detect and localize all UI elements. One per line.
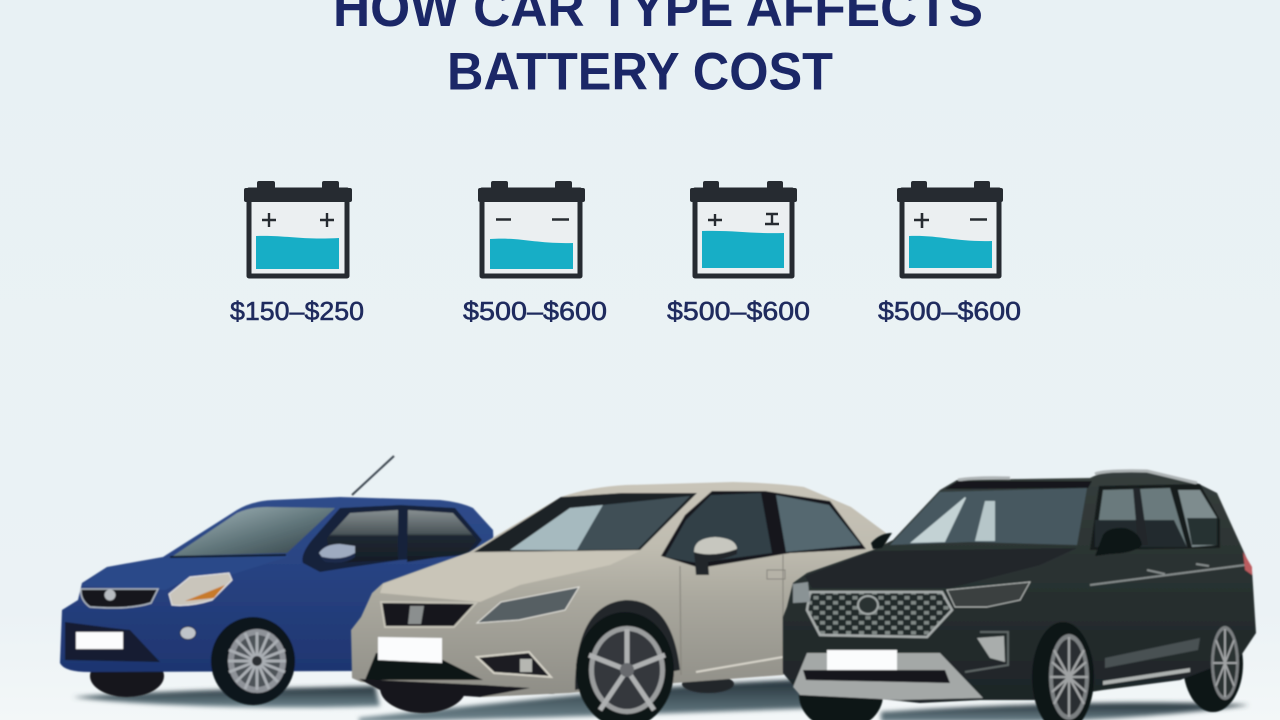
antenna	[352, 456, 394, 495]
wheel arch	[575, 600, 680, 690]
license plate	[827, 650, 897, 670]
small underbody wheel	[526, 676, 570, 694]
mirror	[319, 544, 355, 561]
left corner lamp	[793, 582, 810, 603]
rear tyre	[682, 675, 734, 693]
battery column: $500–$600 first	[463, 181, 607, 326]
body	[783, 472, 1256, 703]
price: $500–$600: $500–$600	[463, 296, 607, 326]
front bumper intake	[65, 622, 160, 662]
windshield	[474, 493, 697, 552]
side windows	[327, 510, 398, 563]
hood	[805, 548, 1077, 588]
fog lamp	[977, 636, 1005, 662]
car: dark SUV	[783, 471, 1256, 720]
sedan-side mirror	[871, 533, 892, 549]
windshield	[890, 488, 1087, 545]
hood	[82, 556, 290, 590]
black roof	[945, 481, 1092, 489]
front wheel	[576, 612, 674, 720]
license plate	[378, 637, 442, 663]
price: $500–$600: $500–$600	[667, 296, 810, 326]
body	[351, 482, 890, 697]
title	[333, 0, 983, 102]
window frame	[302, 505, 482, 572]
headlight	[169, 573, 232, 605]
grille	[81, 589, 158, 608]
battery column: $500–$600 third	[878, 181, 1021, 326]
car: blue hatchback	[60, 456, 500, 705]
near-side front wheel	[799, 660, 883, 720]
hood	[380, 551, 640, 602]
front side window	[665, 493, 772, 563]
title: BATTERY COST	[447, 42, 833, 102]
rear tyre	[1183, 616, 1243, 712]
mirror	[694, 537, 737, 559]
price: $500–$600: $500–$600	[878, 296, 1021, 326]
license plate	[76, 632, 123, 649]
headlight	[947, 582, 1030, 607]
battery column: $150–$250	[230, 181, 364, 326]
lower chrome bumper	[793, 653, 983, 700]
roof rails	[958, 471, 1197, 483]
price: $150–$250: $150–$250	[230, 296, 364, 326]
rear wheel	[1211, 626, 1239, 700]
side windows	[1095, 488, 1187, 547]
icon: battery 2	[478, 181, 585, 276]
beltline and handles	[1090, 564, 1245, 585]
taillight	[1243, 552, 1252, 575]
icon: battery 3	[690, 181, 797, 276]
icon: battery 1	[244, 181, 352, 276]
far front wheel	[90, 655, 164, 697]
fog lamp	[180, 626, 196, 640]
door handle and seam	[680, 555, 785, 675]
grille	[381, 602, 476, 627]
window frame	[661, 491, 866, 568]
bumper slot	[803, 670, 950, 683]
mirror	[1095, 528, 1142, 556]
ground shadows	[73, 680, 1249, 720]
battery column: $500–$600 second	[667, 181, 810, 326]
front wheel	[211, 617, 295, 705]
front wheel	[1032, 622, 1094, 720]
side sill	[696, 657, 783, 672]
rear side window	[776, 495, 861, 552]
body	[60, 497, 500, 672]
headlight	[477, 587, 579, 623]
car: silver sedan	[351, 482, 890, 720]
chrome door sills	[1103, 668, 1190, 685]
fog lamp housing	[477, 652, 551, 677]
far front wheel	[380, 663, 466, 713]
grille	[807, 592, 952, 637]
windshield	[173, 507, 335, 556]
side window frame	[1090, 484, 1220, 550]
icon: battery 4	[897, 181, 1003, 276]
lower intake	[365, 653, 483, 680]
